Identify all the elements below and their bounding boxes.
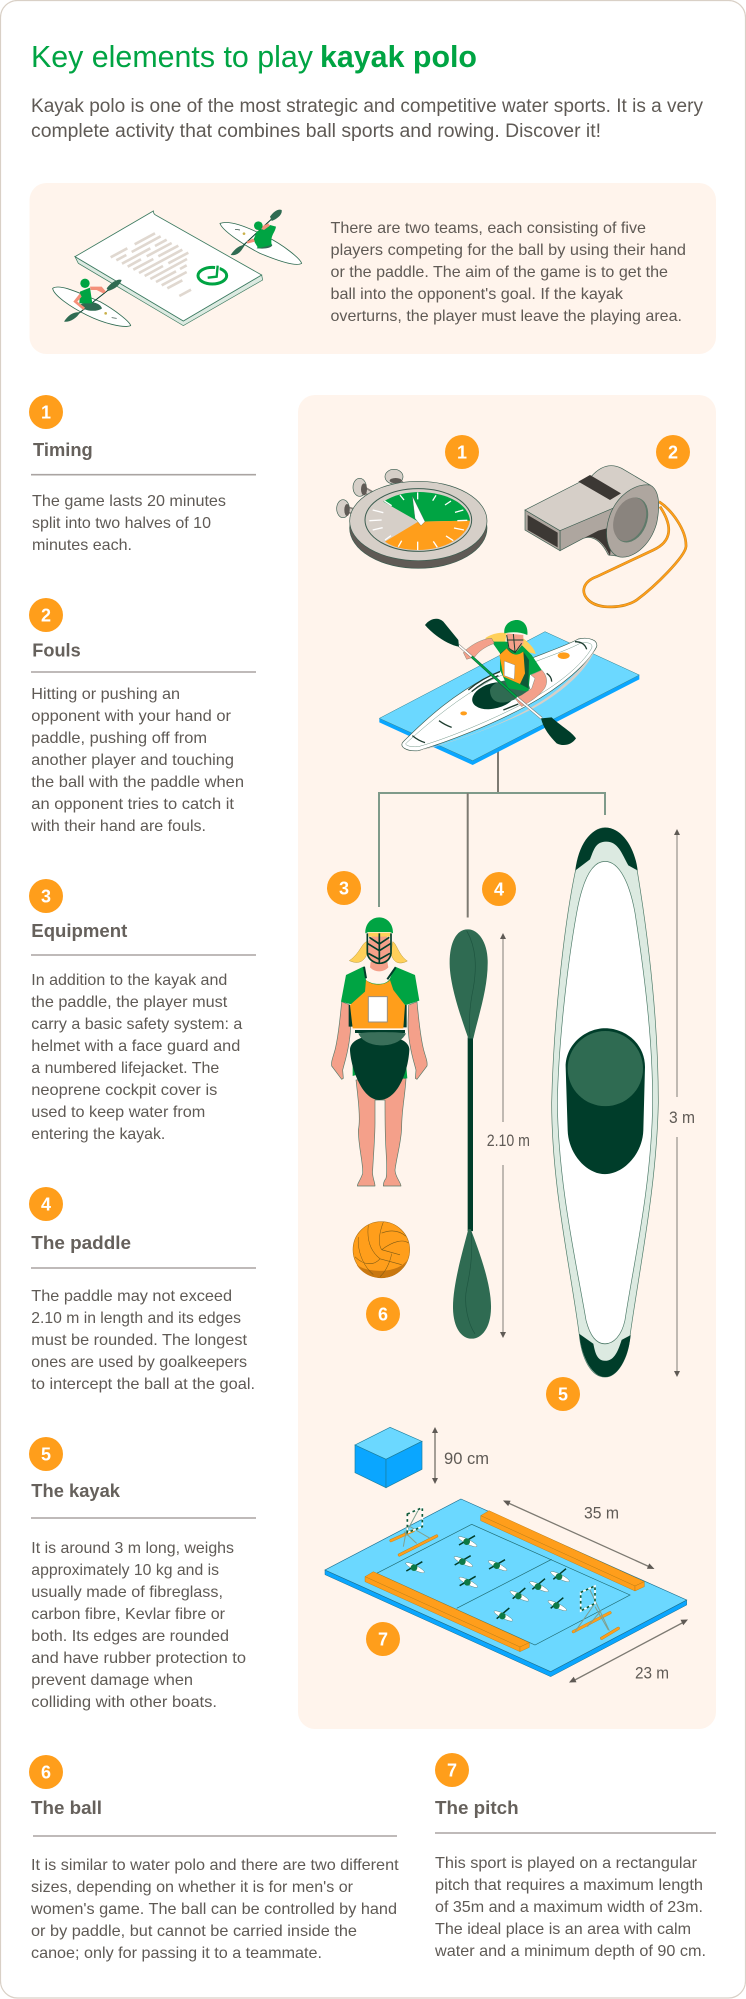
section 4: the paddle: to intercept the ball at the goal. [31, 1376, 255, 1393]
dimension: pitch width: 23 m [635, 1665, 669, 1683]
section 6: the ball: canoe; only for passing it to a teammate. [31, 1945, 322, 1962]
section 4: the paddle: must be rounded. The longest [31, 1332, 248, 1349]
title: Key elements to play [31, 39, 313, 74]
introduction text: Kayak polo is one of the most strategic and competitive water sports. It is a very [31, 96, 703, 117]
section 3: equipment: entering the kayak. [31, 1126, 165, 1143]
section 4: the paddle: 4 [41, 1194, 51, 1214]
section 5: the kayak: and have rubber protection to [31, 1650, 246, 1667]
section 5: the kayak: usually made of fibreglass, [31, 1584, 223, 1601]
overview text [330, 220, 686, 325]
section 4: the paddle: ones are used by goalkeepers [31, 1354, 247, 1371]
section 5: the kayak [29, 1437, 256, 1711]
overview text: overturns, the player must leave the playing area. [330, 308, 682, 325]
section 6: the ball [29, 1755, 399, 1962]
illustration: paddle [450, 929, 491, 1339]
section 3: equipment: Equipment [31, 921, 127, 941]
section 4: the paddle: The paddle [31, 1233, 131, 1253]
dimension: paddle length: 2.10 m [487, 1132, 530, 1150]
dimension: pitch length [503, 1500, 654, 1569]
section 6: the ball: sizes, depending on whether it is for men's or [31, 1879, 354, 1896]
icon: stopwatch [337, 469, 487, 568]
section 6: the ball: The ball [31, 1798, 102, 1818]
section 5: the kayak: It is around 3 m long, weighs [31, 1540, 234, 1557]
section 5: the kayak: 5 [41, 1444, 51, 1464]
number badge 3 [327, 871, 361, 905]
section 7: the pitch: This sport is played on a rectangular [435, 1855, 698, 1872]
illustration: player in kayak on water [379, 619, 639, 765]
connector lines [379, 750, 605, 918]
dimension: pitch width [569, 1620, 688, 1683]
dimension: kayak length: 3 m [669, 1109, 695, 1127]
section 2: fouls: another player and touching [31, 752, 234, 769]
section 3: equipment: a numbered lifejacket. The [31, 1060, 219, 1077]
overview text: ball into the opponent's goal. If the kayak [330, 286, 624, 303]
illustration: kayak top view [552, 828, 658, 1377]
icon: kayaker top right [220, 210, 302, 264]
number badge 2: 2 [668, 442, 678, 462]
section 2: fouls: an opponent tries to catch it [31, 796, 235, 813]
number badge 1 [445, 435, 479, 469]
goal left [391, 1508, 437, 1555]
overview text: There are two teams, each consisting of five [330, 220, 646, 237]
section 1: timing: minutes each. [32, 537, 132, 554]
section 3: equipment: In addition to the kayak and [31, 972, 227, 989]
overview text: or the paddle. The aim of the game is to get the [330, 264, 668, 281]
spectator stand near [365, 1572, 529, 1652]
dimension: depth: 90 cm [444, 1450, 489, 1468]
section 5: the kayak: carbon fibre, Kevlar fibre or [31, 1606, 226, 1623]
number badge 2 [656, 435, 690, 469]
section 6: the ball: women's game. The ball can be controlled by hand [30, 1901, 397, 1918]
section 7: the pitch: of 35m and a maximum width of 23m. [435, 1899, 703, 1916]
overview text: players competing for the ball by using their hand [330, 242, 686, 259]
title [31, 39, 477, 74]
section 5: the kayak: colliding with other boats. [31, 1694, 217, 1711]
section 3: equipment: the paddle, the player must [31, 994, 228, 1011]
number badge 6: 6 [378, 1304, 388, 1324]
section 4: the paddle [29, 1187, 256, 1393]
dimension: paddle length [487, 933, 530, 1338]
section 6: the ball: It is similar to water polo and there are two different [31, 1857, 399, 1874]
number badge 3: 3 [339, 878, 349, 898]
introduction text [31, 96, 703, 142]
section 1: timing [29, 395, 256, 554]
illustration: pitch [325, 1499, 687, 1677]
section 1: timing: split into two halves of 10 [32, 515, 211, 532]
illustration: player front view [332, 917, 427, 1186]
section 7: the pitch: 7 [447, 1760, 457, 1780]
spectator stand far [481, 1511, 644, 1591]
section 3: equipment: used to keep water from [31, 1104, 205, 1121]
icon: rulebook with two kayakers [53, 210, 302, 326]
section 2: fouls: opponent with your hand or [31, 708, 232, 725]
icon: kayaker bottom left [53, 279, 131, 326]
section 2: fouls: paddle, pushing off from [31, 730, 207, 747]
section 1: timing: The game lasts 20 minutes [32, 493, 226, 510]
number badge 6 [366, 1297, 400, 1331]
illustration: ball [353, 1222, 410, 1278]
section 3: equipment: 3 [41, 886, 51, 906]
section 2: fouls [29, 598, 256, 835]
section 7: the pitch [434, 1753, 716, 1960]
section 2: fouls: Fouls [32, 641, 81, 661]
section 3: equipment: helmet with a face guard and [31, 1038, 240, 1055]
section 7: the pitch: The pitch [435, 1798, 519, 1818]
number badge 5 [546, 1377, 580, 1411]
section 4: the paddle: The paddle may not exceed [31, 1288, 232, 1305]
number badge 4: 4 [494, 880, 504, 900]
section 3: equipment [29, 879, 256, 1143]
section 2: fouls: the ball with the paddle when [31, 774, 244, 791]
panel: illustrations [298, 395, 716, 1729]
section 6: the ball: 6 [41, 1762, 51, 1782]
panel: game overview [30, 183, 716, 354]
introduction text: complete activity that combines ball sports and rowing. Discover it! [31, 121, 601, 142]
number badge 5: 5 [558, 1384, 568, 1404]
icon: whistle [525, 466, 686, 607]
section 6: the ball: or by paddle, but cannot be carried inside the [31, 1923, 357, 1940]
section 3: equipment: carry a basic safety system: a [31, 1016, 242, 1033]
title: kayak polo [320, 39, 477, 74]
section 7: the pitch: The ideal place is an area with calm [435, 1921, 691, 1938]
section 1: timing: 1 [41, 402, 51, 422]
section 5: the kayak: prevent damage when [31, 1672, 193, 1689]
dimension: kayak length [669, 829, 695, 1377]
section 4: the paddle: 2.10 m in length and its edges [31, 1310, 241, 1327]
section 5: the kayak: approximately 10 kg and is [31, 1562, 219, 1579]
section 3: equipment: neoprene cockpit cover is [31, 1082, 217, 1099]
section 7: the pitch: water and a minimum depth of 90 cm. [434, 1943, 706, 1960]
section 7: the pitch: pitch that requires a maximum length [435, 1877, 703, 1894]
illustration: depth cube [355, 1427, 422, 1488]
mini players [405, 1535, 570, 1623]
number badge 4 [482, 872, 516, 906]
section 5: the kayak: both. Its edges are rounded [31, 1628, 229, 1645]
dimension: pitch length: 35 m [584, 1505, 619, 1523]
section 2: fouls: Hitting or pushing an [31, 686, 180, 703]
number badge 7 [366, 1622, 400, 1656]
number badge 1: 1 [457, 442, 467, 462]
number badge 7: 7 [378, 1630, 388, 1650]
section 5: the kayak: The kayak [31, 1481, 121, 1501]
section 2: fouls: 2 [41, 606, 51, 626]
section 1: timing: Timing [33, 440, 93, 460]
dimension: depth [432, 1427, 489, 1484]
goal right [573, 1586, 618, 1638]
section 2: fouls: with their hand are fouls. [30, 818, 206, 835]
